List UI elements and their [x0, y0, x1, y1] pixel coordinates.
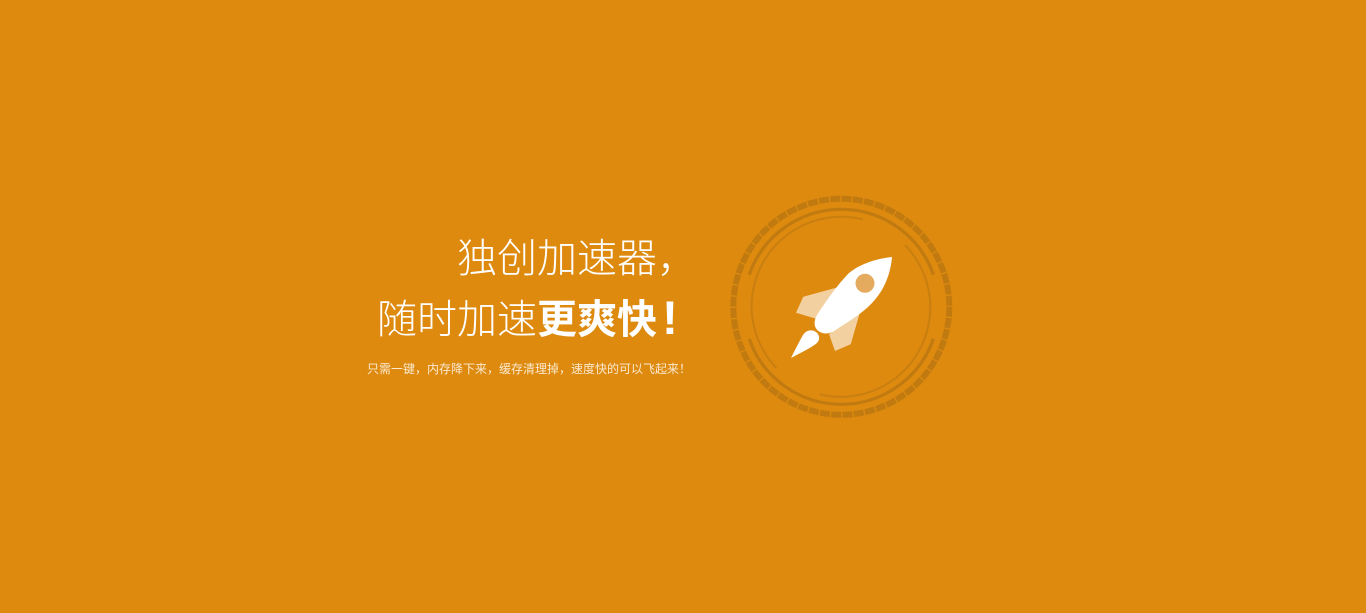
rocket right fin [829, 314, 860, 351]
inner ring arcs [752, 217, 930, 397]
heading line 1: 独创加速器， [457, 237, 697, 281]
rocket flame [791, 330, 819, 358]
heading line 2: 随时加速更爽快 [377, 298, 657, 342]
rocket window [856, 274, 874, 293]
heading exclamation mark: ! [662, 291, 678, 344]
outer dashed ring [733, 199, 949, 415]
rocket left fin [796, 288, 837, 319]
subtitle text: 只需一键，内存降下来，缓存清理掉，速度快的可以飞起来！ [367, 362, 691, 376]
rocket body [815, 257, 892, 333]
middle ring arcs [749, 209, 933, 404]
